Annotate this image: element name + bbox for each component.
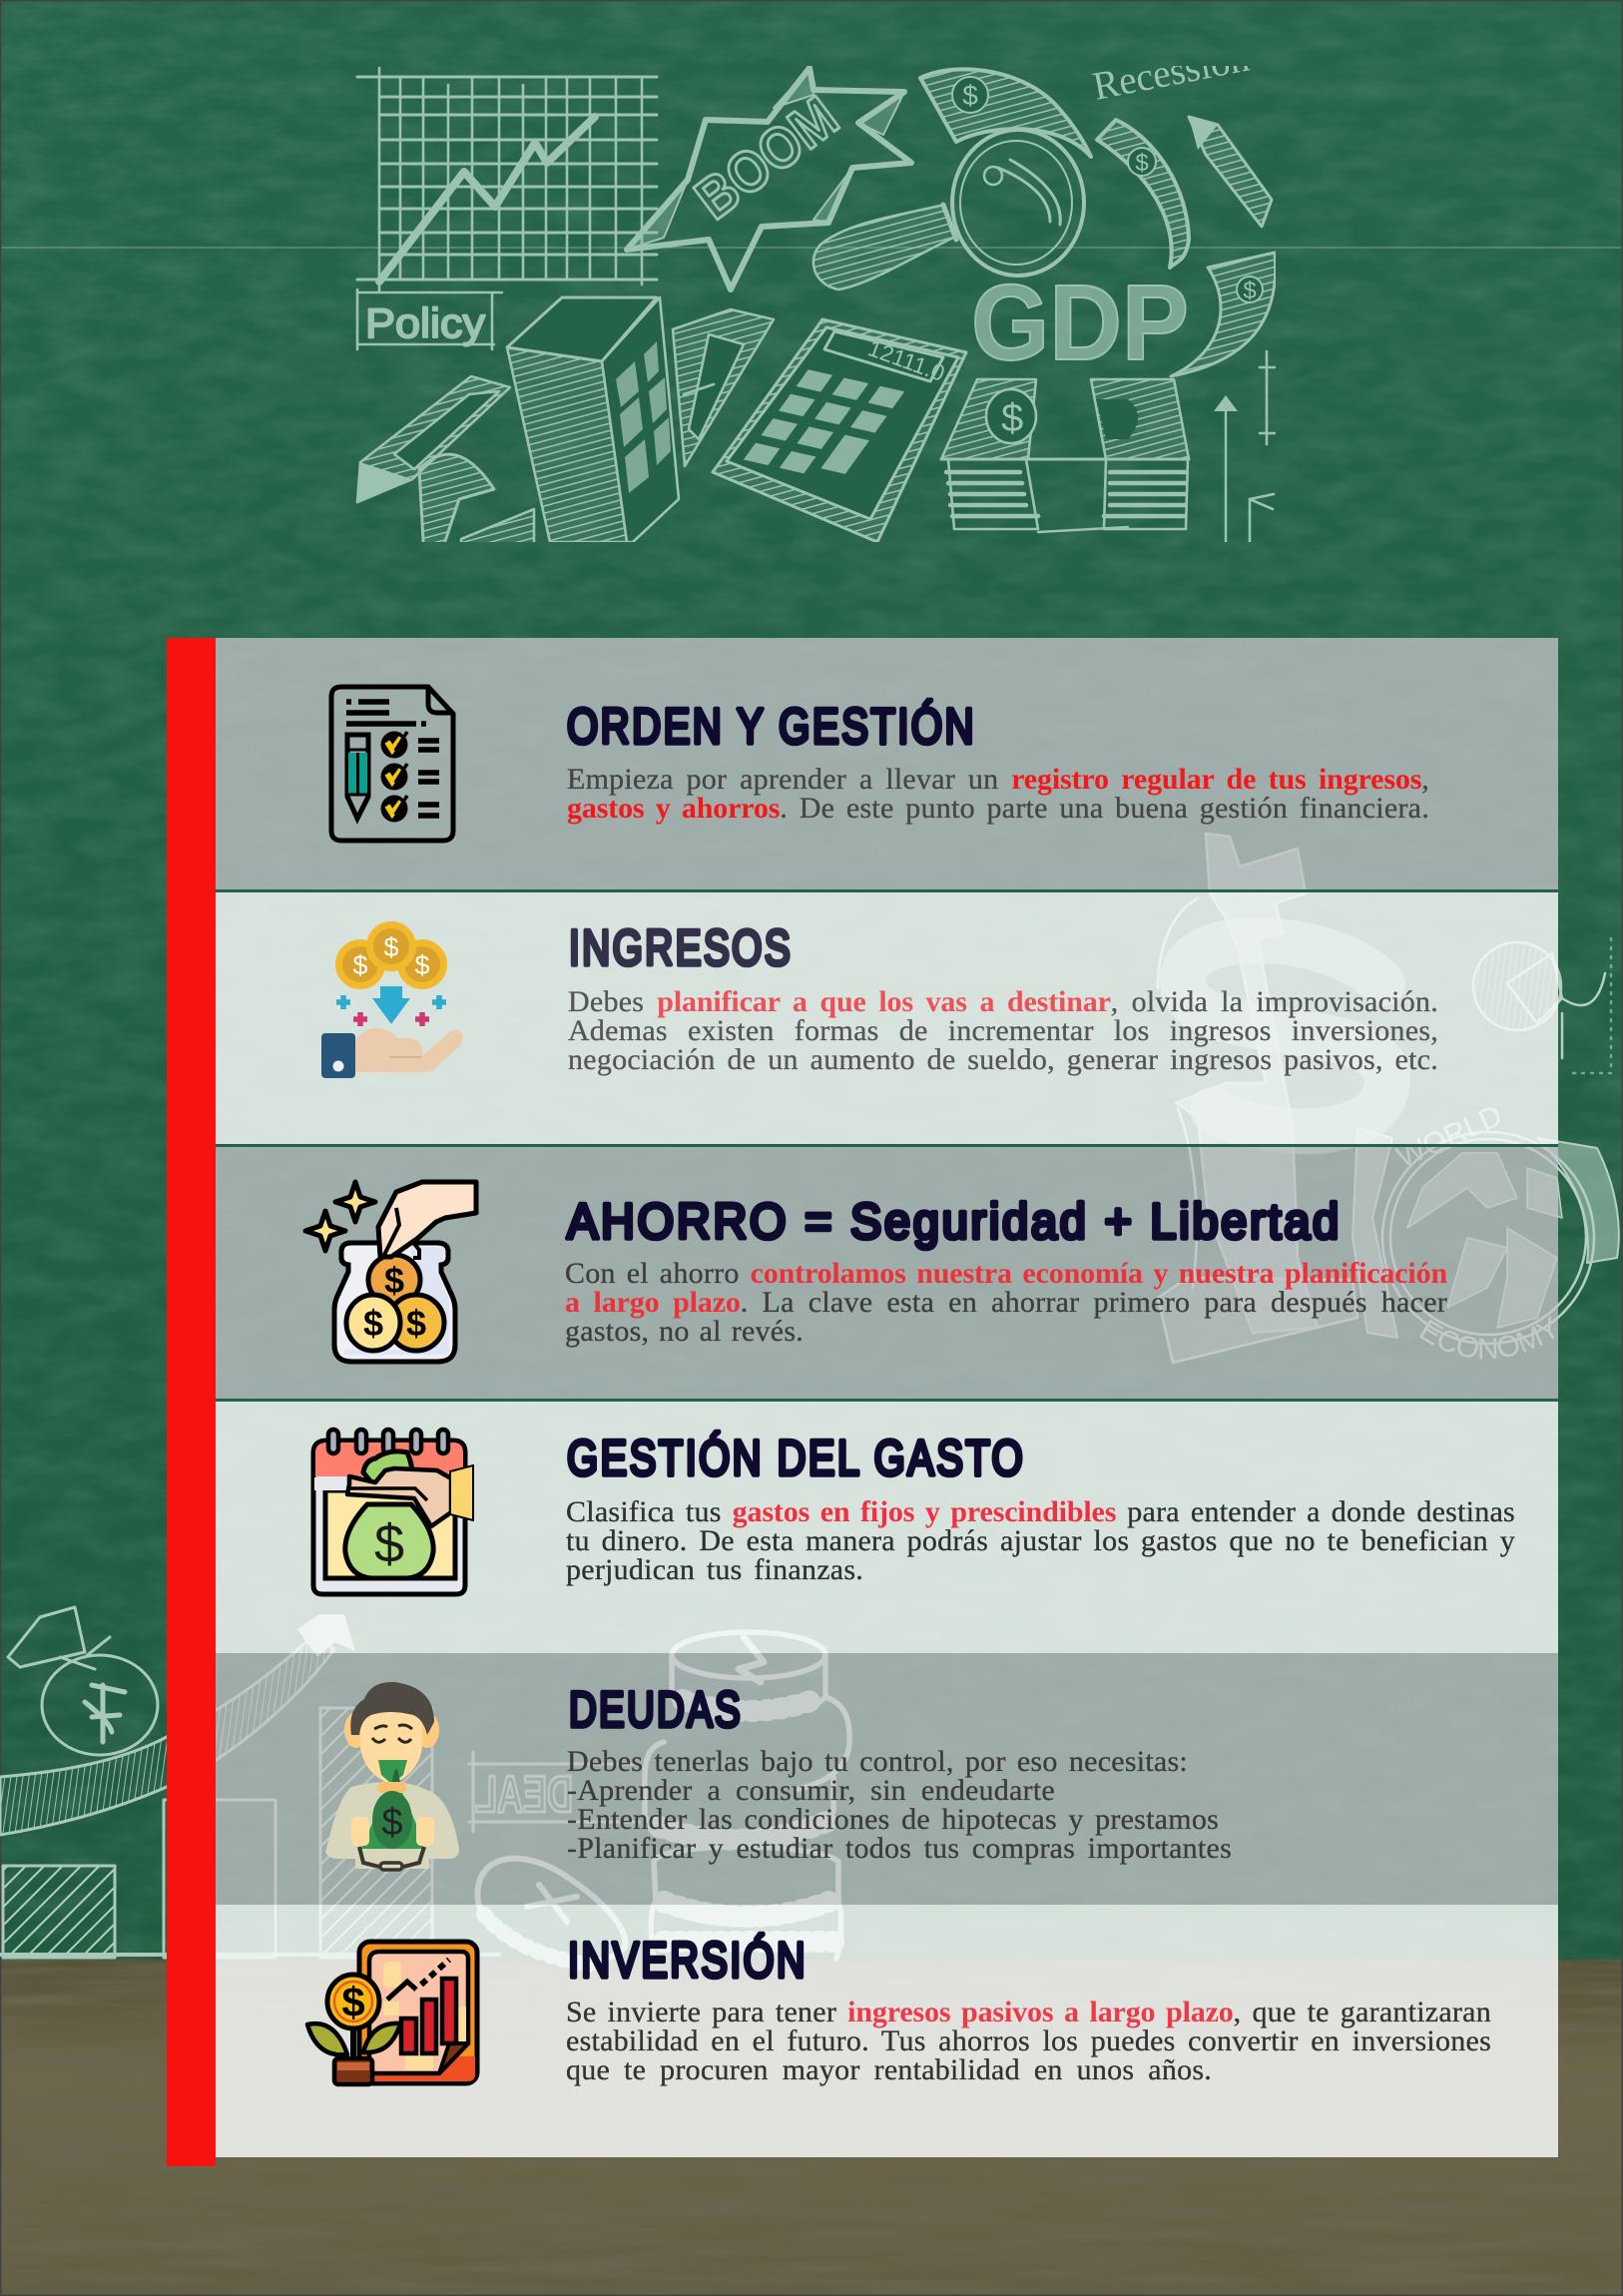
panel: ingresos bbox=[216, 889, 1558, 1144]
title: inversion: INVERSIÓN bbox=[568, 1933, 808, 1989]
title: ahorro: AHORRO = Seguridad + Libertad bbox=[567, 1194, 1342, 1250]
text: gestion del gasto: tu dinero. De esta manera podrás ajustar los gastos que no te benefician y bbox=[566, 1524, 1515, 1557]
text: orden y gestion bbox=[567, 763, 1429, 825]
text: inversion: que te procuren mayor rentabilidad en unos años. bbox=[566, 2053, 1212, 2086]
left arrow bbox=[357, 376, 534, 559]
panel: gestion del gasto bbox=[216, 1399, 1558, 1653]
buildings bbox=[507, 297, 774, 542]
globe doodle bbox=[1352, 1099, 1620, 1360]
recession text: Recession bbox=[1089, 35, 1253, 109]
top chalk doodles: $ bbox=[1135, 150, 1149, 177]
GDP text: GDP bbox=[971, 262, 1189, 382]
title: deudas: DEUDAS bbox=[569, 1682, 743, 1738]
BOOM burst bbox=[627, 68, 911, 289]
icon: indebted man bbox=[325, 1682, 459, 1872]
money stack: $ bbox=[1001, 396, 1023, 440]
icon: investment chart and plant: $ bbox=[341, 1979, 365, 2025]
text: ingresos: negociación de un aumento de sueldo, generar ingresos pasivos, etc. bbox=[568, 1043, 1438, 1076]
title: gestion del gasto: GESTIÓN DEL GASTO bbox=[567, 1431, 1025, 1486]
icon: coins in jar: $ bbox=[363, 1303, 383, 1344]
top chalk doodles: $ bbox=[1243, 278, 1257, 304]
calculator bbox=[713, 319, 966, 542]
icon: calendar money bag: $ bbox=[374, 1514, 404, 1574]
money bag doodle bbox=[8, 1607, 158, 1755]
text: gestion del gasto: perjudican tus finanzas. bbox=[566, 1553, 863, 1586]
text: ingresos: Ademas existen formas de incrementar los ingresos inversiones, bbox=[568, 1014, 1438, 1047]
text: deudas: -Entender las condiciones de hipotecas y prestamos bbox=[567, 1803, 1219, 1836]
text: ingresos: Debes planificar a que los vas a destinar, olvida la improvisación. bbox=[568, 985, 1438, 1018]
panel: ahorro bbox=[216, 1144, 1558, 1402]
calculator: 12111.0 bbox=[864, 334, 948, 386]
icon: coins over hand: $ bbox=[383, 932, 399, 962]
text: inversion: Se invierte para tener ingresos pasivos a largo plazo, que te garantizaran bbox=[566, 1996, 1491, 2028]
icon: investment chart and plant bbox=[305, 1939, 479, 2086]
icon: coins in jar: $ bbox=[406, 1303, 426, 1344]
text: ahorro: gastos, no al revés. bbox=[565, 1315, 804, 1348]
text: ingresos bbox=[568, 985, 1438, 1076]
growth swoosh bbox=[0, 1637, 334, 1835]
title: ingresos: INGRESOS bbox=[569, 920, 793, 976]
icon: checklist document bbox=[329, 685, 455, 843]
coin stacks bbox=[477, 1632, 849, 1965]
text: gestion del gasto bbox=[566, 1495, 1515, 1586]
text: gestion del gasto: Clasifica tus gastos en fijos y prescindibles para entender a donde destinas bbox=[566, 1495, 1515, 1528]
globe doodle: WORLD bbox=[1391, 1099, 1507, 1174]
text: ahorro: Con el ahorro controlamos nuestra economía y nuestra planificación bbox=[565, 1257, 1447, 1290]
text: deudas: -Aprender a consumir, sin endeudarte bbox=[567, 1774, 1055, 1807]
panel: deudas bbox=[216, 1653, 1558, 1905]
text: deudas bbox=[567, 1745, 1232, 1865]
money stack bbox=[941, 379, 1189, 532]
red side bar bbox=[167, 638, 216, 2166]
text: orden y gestion: gastos y ahorros. De este punto parte una buena gestión financiera. bbox=[567, 792, 1429, 825]
panel: inversion bbox=[216, 1905, 1558, 2157]
title: orden y gestion: ORDEN Y GESTIÓN bbox=[567, 699, 976, 755]
icon: coins in jar: $ bbox=[384, 1260, 404, 1301]
top chalk doodles bbox=[357, 35, 1276, 559]
bills bbox=[920, 69, 1276, 376]
text: inversion bbox=[566, 1996, 1491, 2086]
deal sign: DEAL bbox=[475, 1766, 573, 1824]
arrow and ticks bbox=[1214, 351, 1275, 542]
policy box: Policy bbox=[365, 299, 485, 346]
banknote roll bbox=[1158, 1278, 1357, 1363]
panel: orden y gestion bbox=[216, 638, 1558, 889]
text: deudas: Debes tenerlas bajo tu control, por eso necesitas: bbox=[567, 1745, 1188, 1778]
bars bbox=[0, 1708, 499, 1958]
big dollar doodle bbox=[1156, 833, 1620, 1364]
text: deudas: -Planificar y estudiar todos tus compras importantes bbox=[567, 1832, 1232, 1865]
icon: indebted man: $ bbox=[381, 1802, 403, 1844]
text: ahorro: a largo plazo. La clave esta en ahorrar primero para después hacer bbox=[565, 1286, 1447, 1319]
policy box bbox=[357, 289, 502, 349]
top chalk doodles: $ bbox=[962, 80, 978, 111]
BOOM burst: BOOM bbox=[684, 84, 850, 232]
icon: coins over hand bbox=[321, 921, 463, 1078]
pie doodle bbox=[1473, 938, 1611, 1073]
globe doodle: ECONOMY bbox=[1419, 1316, 1555, 1360]
magnifier bbox=[813, 130, 1084, 289]
deal sign bbox=[469, 1752, 639, 1832]
text: ahorro bbox=[565, 1257, 1447, 1348]
text: inversion: estabilidad en el futuro. Tus ahorros los puedes convertir en inversiones bbox=[566, 2024, 1491, 2057]
chart grid bbox=[357, 68, 657, 291]
lower chalk doodles bbox=[0, 1607, 849, 1965]
icon: calendar money bag bbox=[311, 1428, 474, 1597]
icon: coins over hand: $ bbox=[414, 950, 430, 980]
icon: coins in jar bbox=[303, 1180, 479, 1364]
icon: coins over hand: $ bbox=[352, 950, 368, 980]
text: orden y gestion: Empieza por aprender a llevar un registro regular de tus ingresos, bbox=[567, 763, 1429, 796]
